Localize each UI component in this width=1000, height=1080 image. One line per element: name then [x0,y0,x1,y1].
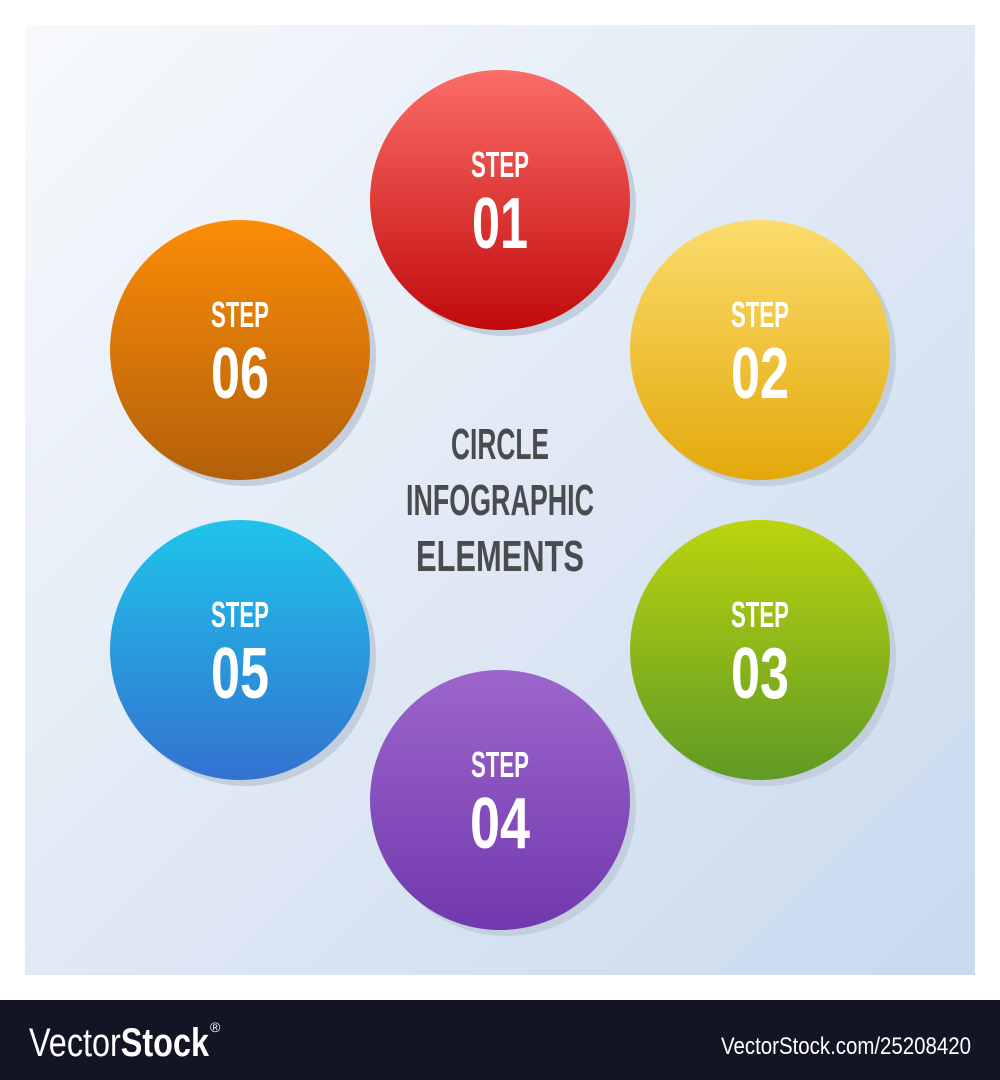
step 03 circle: STEP [731,594,789,635]
step 06 circle: STEP [211,294,269,335]
center title [406,420,594,581]
step 03 circle [630,520,896,786]
step 02 circle: 02 [731,334,789,414]
step 01 circle: 01 [472,184,528,264]
step 04 circle [370,670,636,936]
step 02 circle: STEP [731,294,789,335]
step 04 circle: STEP [471,744,529,785]
step 05 circle [110,520,376,786]
footer bar [0,1000,1000,1080]
step 04 circle: 04 [470,784,530,864]
step 05 circle: STEP [211,594,269,635]
step 01 circle: STEP [471,144,529,185]
step 06 circle [110,220,376,486]
center title: CIRCLE [451,420,549,469]
step 02 circle [630,220,896,486]
step 03 circle: 03 [731,634,789,714]
footer bar: ® [210,1019,221,1035]
step 05 circle: 05 [211,634,269,714]
footer bar: VectorStock [29,1021,210,1065]
center title: INFOGRAPHIC [406,476,594,525]
step 01 circle [370,70,636,336]
step 06 circle: 06 [211,334,269,414]
center title: ELEMENTS [416,532,584,581]
